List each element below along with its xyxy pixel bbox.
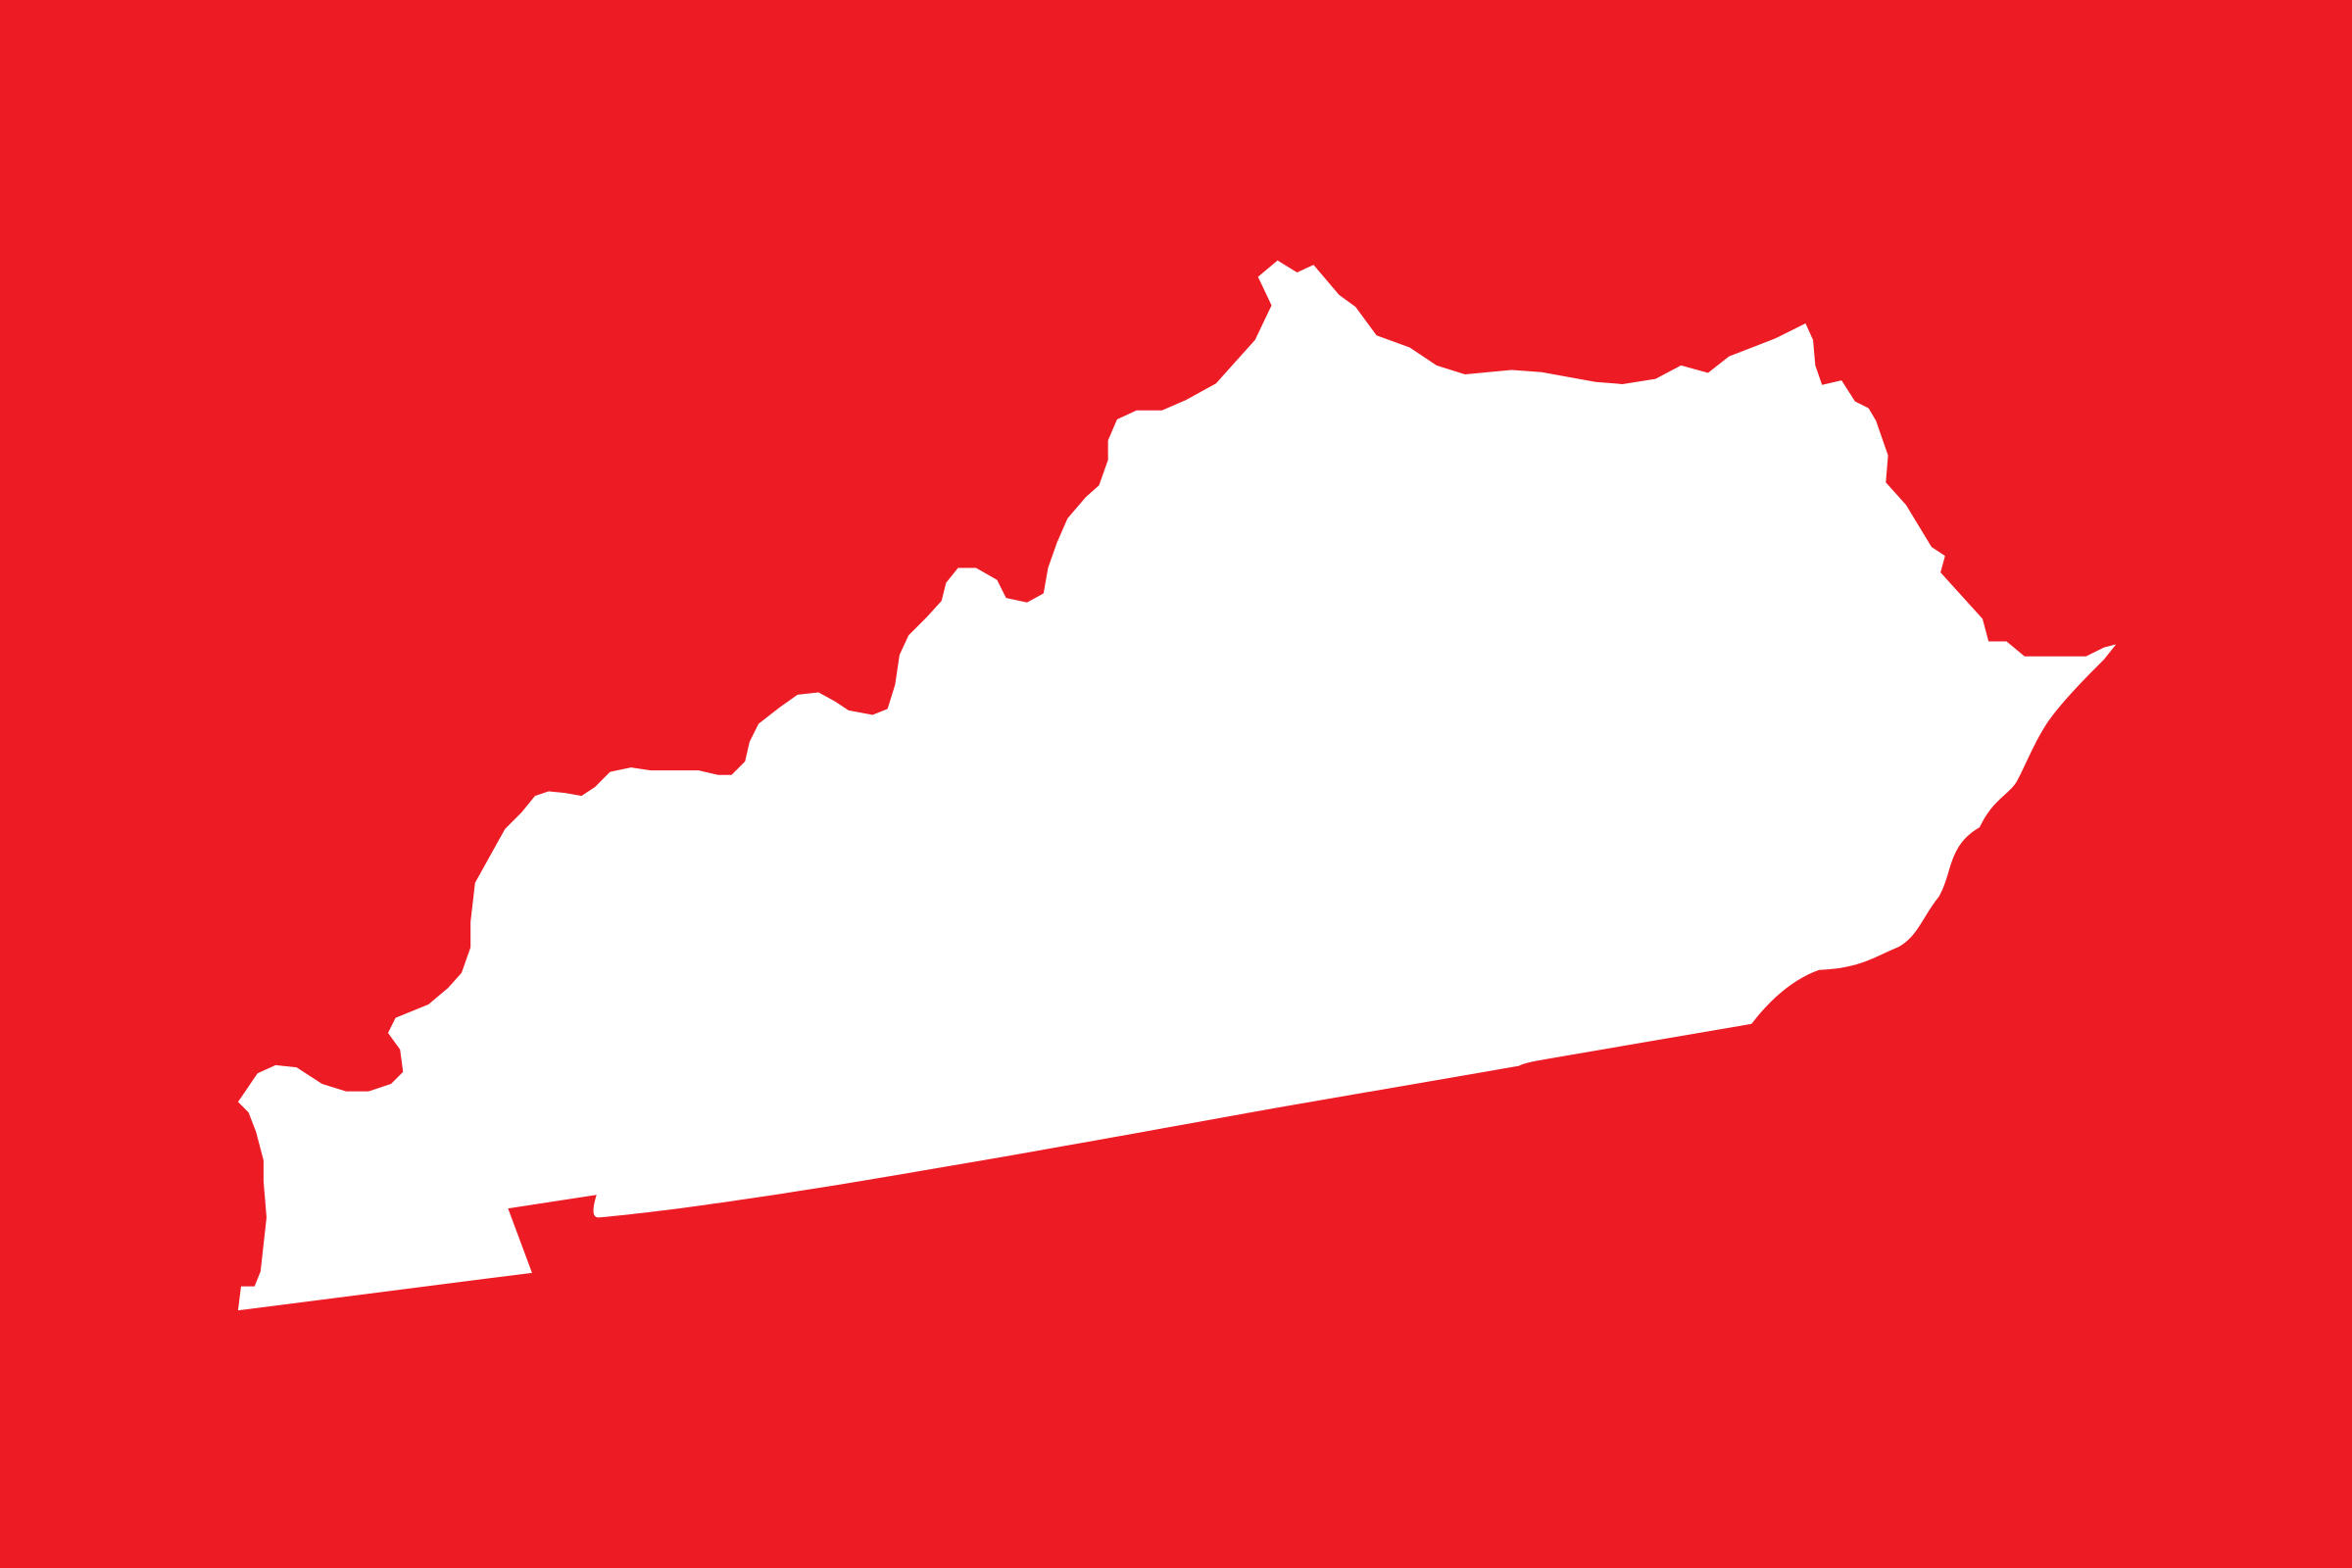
map: Kentucky state silhouette — [238, 261, 2116, 1310]
